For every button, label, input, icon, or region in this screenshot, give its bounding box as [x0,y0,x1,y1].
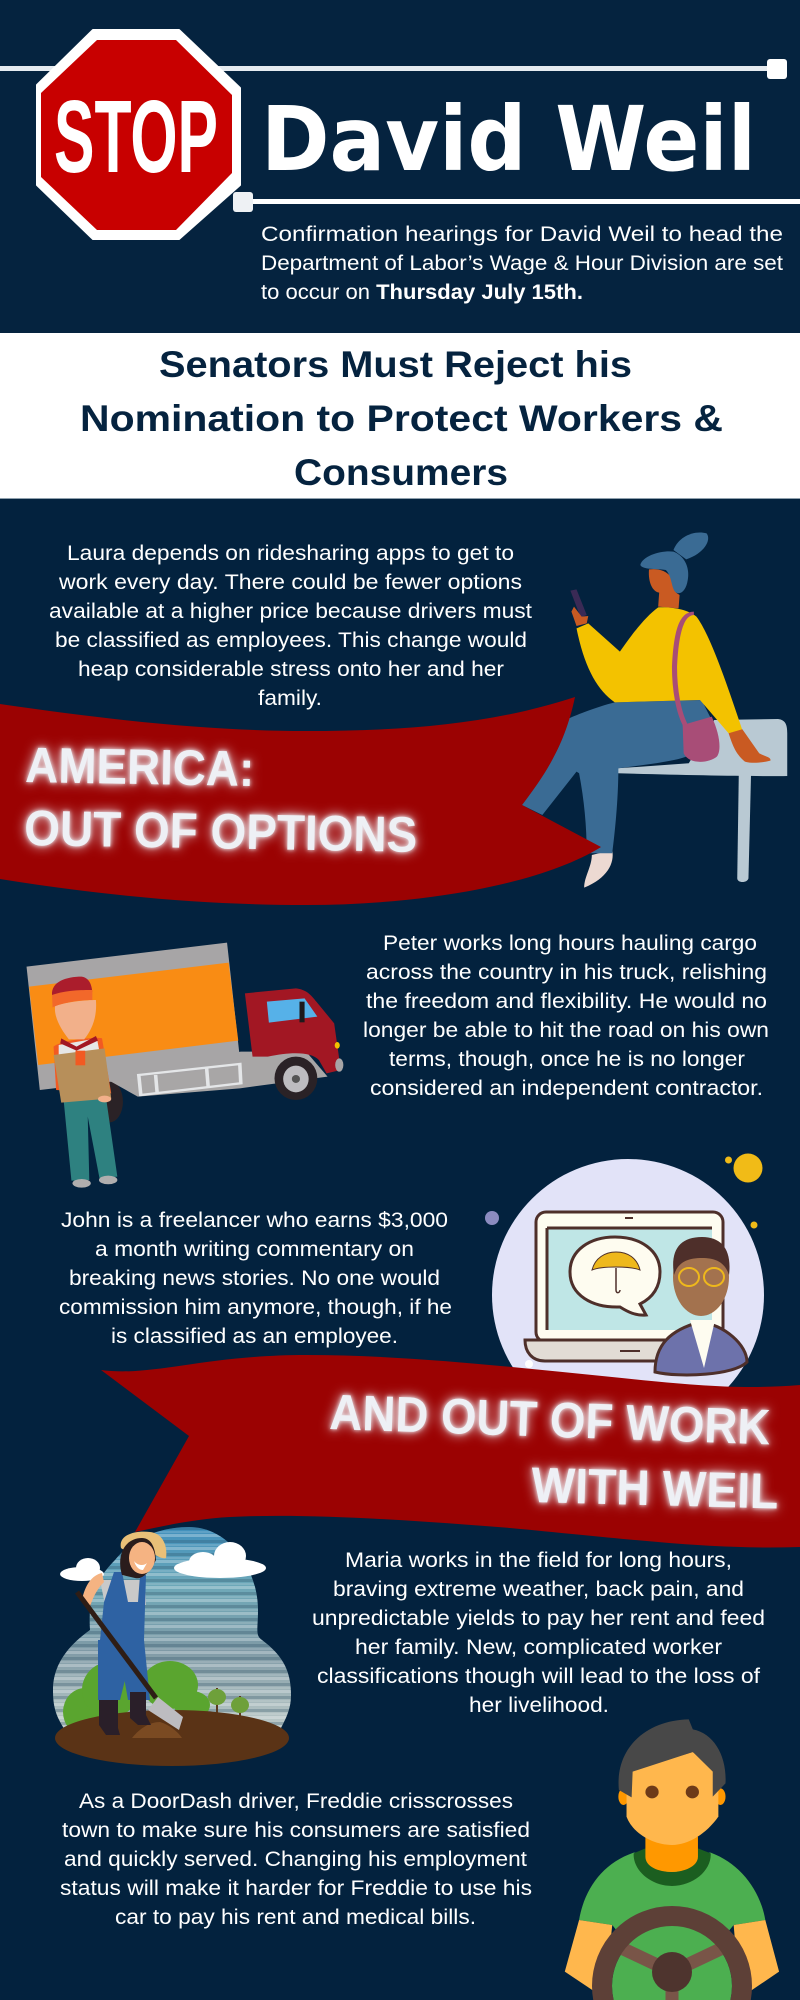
banner: and out of work with Weil: AND OUT OF WORK [329,1384,771,1455]
text: Freddie: and quickly served. Changing his employment [64,1848,527,1871]
text: Maria: classifications though will lead to the loss of [317,1665,760,1688]
text: Laura: work every day. There could be fewer options [58,571,522,594]
text: Laura [49,542,532,710]
text: Peter: across the country in his truck, relishing [366,961,767,984]
bottom rule with handle [233,192,800,212]
banner: and out of work with Weil: WITH WEIL [531,1457,779,1519]
text: Peter: terms, though, once he is no longer [389,1048,745,1071]
text: Freddie: car to pay his rent and medical bills. [115,1906,476,1929]
text: Maria: unpredictable yields to pay her rent and feed [312,1607,765,1630]
icon: stop sign [37,30,240,239]
text: Peter: longer be able to hit the road on his own [363,1019,769,1042]
icon: stop sign: STOP [54,79,218,194]
illustration: Laura on a bench [522,532,787,888]
intro text: to occur on Thursday July 15th. [261,281,583,304]
title: David Weil [261,87,756,191]
text: John: commission him anymore, though, if he [59,1296,452,1319]
text: Maria [312,1549,765,1717]
text: John: breaking news stories. No one would [69,1267,440,1290]
text: Freddie: town to make sure his consumers are satisfied [62,1819,530,1842]
banner: America out of options: AMERICA: [25,737,255,797]
heading band: Consumers [294,452,508,493]
text: Freddie [60,1790,532,1929]
text: Laura: available at a higher price because drivers must [49,600,532,623]
text: John: a month writing commentary on [95,1238,414,1261]
text: Peter: Peter works long hours hauling cargo [383,932,757,955]
text: Peter: the freedom and flexibility. He would no [366,990,767,1013]
text: Laura: heap considerable stress onto her and her [78,658,504,681]
banner: America out of options: OUT OF OPTIONS [24,800,418,863]
text: Laura: be classified as employees. This change would [55,629,527,652]
text: John: John is a freelancer who earns $3,000 [61,1209,448,1232]
banner: and out of work with Weil [101,1355,800,1548]
illustration: Freddie driving [565,1719,779,2000]
banner: America out of options [0,697,601,905]
intro text: Department of Labor’s Wage & Hour Division are set [261,252,783,275]
text: Freddie: As a DoorDash driver, Freddie crisscrosses [79,1790,513,1813]
illustration: John at laptop [485,1154,764,1431]
text: Laura: family. [258,687,322,710]
text: Maria: her livelihood. [469,1694,609,1717]
illustration: Peter and truck [27,943,343,1188]
intro text: Confirmation hearings for David Weil to head the [261,223,783,246]
text: Maria: Maria works in the field for long hours, [345,1549,732,1572]
illustration: Maria farming [50,1525,295,1766]
heading band: Nomination to Protect Workers & [80,398,723,439]
text: Maria: her family. New, complicated worker [355,1636,722,1659]
text: Maria: braving extreme weather, back pain, and [333,1578,744,1601]
text: John [59,1209,452,1348]
text: Peter [363,932,769,1100]
text: John: is classified as an employee. [111,1325,398,1348]
text: Freddie: status will make it harder for Freddie to use his [60,1877,532,1900]
intro text [261,223,783,304]
top rule with handle [0,59,787,79]
heading band: Senators Must Reject his [159,344,632,385]
text: Peter: considered an independent contractor. [370,1077,763,1100]
text: Laura: Laura depends on ridesharing apps to get to [67,542,514,565]
heading band [0,333,800,499]
header panel [0,0,800,333]
